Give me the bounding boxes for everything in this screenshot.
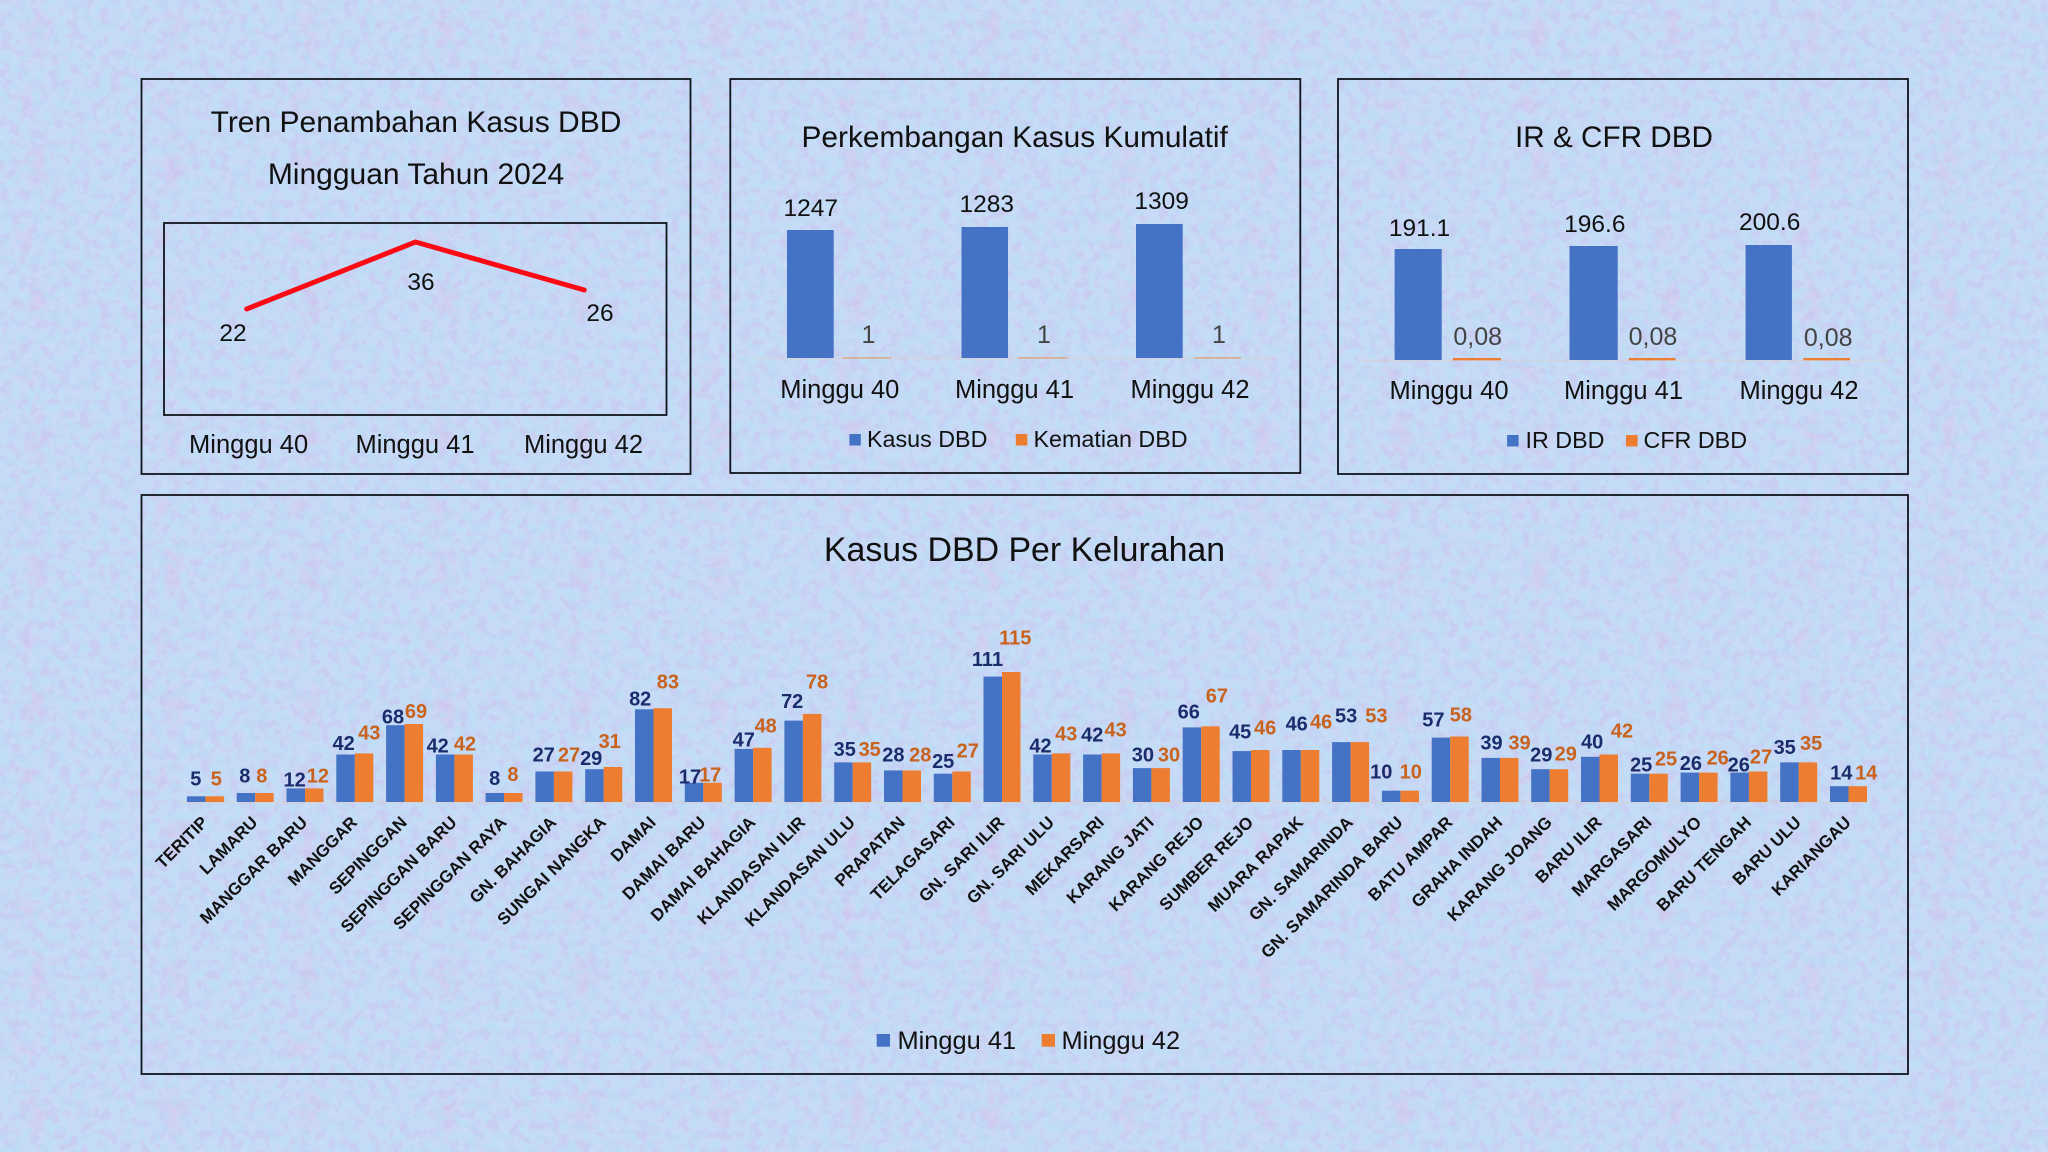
KLANDASAN ULU: 35 bbox=[859, 739, 881, 761]
KARANG JATI: 30 bbox=[1132, 745, 1154, 767]
SEPINGGAN: 69 bbox=[405, 701, 427, 723]
GN. SAMARINDA BARU bbox=[1257, 762, 1422, 962]
bar chart: IR and CFR: 0,08 bbox=[1629, 323, 1677, 351]
SEPINGGAN bbox=[325, 701, 427, 898]
GN. BAHAGIA: GN. BAHAGIA bbox=[466, 813, 560, 907]
DAMAI BARU: 17 bbox=[699, 765, 721, 787]
GRAHA INDAH bbox=[1408, 732, 1531, 911]
KARIANGAU: 14 bbox=[1855, 762, 1878, 784]
KLANDASAN ILIR: 78 bbox=[806, 671, 828, 693]
SEPINGGAN RAYA bbox=[390, 764, 523, 934]
MUARA RAPAK: 46 bbox=[1286, 714, 1308, 736]
SUNGAI NANGKA: SUNGAI NANGKA bbox=[494, 813, 610, 929]
title: weekly trend bbox=[211, 106, 621, 191]
bar chart: cumulative cases: 1 bbox=[1212, 321, 1226, 349]
GN. BAHAGIA bbox=[466, 745, 580, 907]
bar chart: IR and CFR: 191.1 bbox=[1389, 215, 1450, 242]
bar chart: IR and CFR: Minggu 40 bbox=[1389, 377, 1509, 405]
MEKARSARI: 42 bbox=[1081, 725, 1103, 747]
MUARA RAPAK: 46 bbox=[1310, 712, 1332, 734]
legend: IR and CFR bbox=[1507, 427, 1747, 453]
MANGGAR: 43 bbox=[358, 722, 380, 744]
DAMAI: 83 bbox=[657, 672, 679, 694]
GN. SAMARINDA BARU: 10 bbox=[1400, 762, 1422, 784]
TERITIP: TERITIP bbox=[152, 813, 212, 872]
bar chart: cumulative cases: 1247 bbox=[783, 195, 838, 222]
BARU ULU: BARU ULU bbox=[1729, 813, 1805, 889]
KARANG JOANG: 29 bbox=[1555, 744, 1577, 766]
KLANDASAN ILIR bbox=[694, 671, 828, 928]
KARIANGAU: KARIANGAU bbox=[1768, 813, 1855, 900]
GRAHA INDAH: 39 bbox=[1480, 732, 1503, 754]
GN. BAHAGIA: 27 bbox=[533, 745, 555, 767]
SEPINGGAN BARU: SEPINGGAN BARU bbox=[337, 813, 461, 936]
DAMAI BARU bbox=[619, 765, 722, 904]
SEPINGGAN RAYA: SEPINGGAN RAYA bbox=[390, 813, 510, 934]
line chart axis labels: Minggu 40 bbox=[189, 431, 308, 459]
KARIANGAU: 14 bbox=[1830, 762, 1853, 784]
KLANDASAN ULU: 35 bbox=[834, 739, 856, 761]
line chart axis labels bbox=[189, 431, 643, 459]
GN. SARI ULU: GN. SARI ULU bbox=[963, 813, 1058, 908]
LAMARU: LAMARU bbox=[196, 813, 261, 878]
TERITIP: 5 bbox=[211, 769, 222, 791]
legend: week 41 and 42 bbox=[877, 1027, 1180, 1055]
SUNGAI NANGKA: 31 bbox=[599, 731, 621, 753]
SEPINGGAN BARU: 42 bbox=[454, 734, 476, 756]
MARGASARI: 25 bbox=[1655, 749, 1677, 771]
SEPINGGAN RAYA: 8 bbox=[507, 764, 518, 786]
MARGOMULYO: MARGOMULYO bbox=[1604, 813, 1705, 915]
panel: cumulative cases bbox=[730, 79, 1300, 473]
line chart axis labels: Minggu 41 bbox=[355, 431, 475, 459]
MANGGAR bbox=[284, 722, 380, 890]
BARU ILIR bbox=[1532, 720, 1633, 887]
legend: week 41 and 42: Minggu 41 bbox=[898, 1027, 1016, 1055]
DAMAI BARU: 17 bbox=[679, 766, 701, 788]
LAMARU bbox=[196, 765, 274, 878]
KARIANGAU bbox=[1768, 762, 1878, 900]
GN. SAMARINDA: GN. SAMARINDA bbox=[1245, 813, 1357, 924]
KARANG JATI: 30 bbox=[1158, 745, 1180, 767]
SEPINGGAN BARU: 42 bbox=[427, 736, 449, 758]
KLANDASAN ILIR: KLANDASAN ILIR bbox=[694, 813, 809, 928]
DAMAI: 82 bbox=[629, 689, 651, 711]
LAMARU: 8 bbox=[256, 765, 267, 787]
MANGGAR: 42 bbox=[332, 733, 355, 755]
BARU ILIR: 40 bbox=[1581, 732, 1603, 754]
title: weekly trend: Mingguan Tahun 2024 bbox=[268, 158, 564, 191]
GN. SARI ILIR: 111 bbox=[972, 649, 1003, 671]
title: IR and CFR: IR & CFR DBD bbox=[1515, 121, 1713, 154]
SEPINGGAN: 68 bbox=[382, 706, 404, 728]
panel: weekly trend line chart bbox=[142, 79, 690, 474]
TERITIP: 5 bbox=[190, 769, 201, 791]
title: cases per kelurahan: Kasus DBD Per Kelurahan bbox=[824, 531, 1225, 569]
MANGGAR BARU bbox=[196, 766, 329, 928]
bar chart: cumulative cases: 1309 bbox=[1134, 188, 1189, 215]
bar chart: IR and CFR bbox=[1362, 209, 1886, 405]
TELAGASARI bbox=[867, 740, 979, 904]
BATU AMPAR: 58 bbox=[1450, 705, 1472, 727]
MUARA RAPAK: MUARA RAPAK bbox=[1204, 812, 1308, 916]
LAMARU: 8 bbox=[239, 765, 250, 787]
bar chart: cases per kelurahan bbox=[152, 627, 1878, 962]
MARGASARI: MARGASARI bbox=[1568, 813, 1656, 900]
GN. BAHAGIA: 27 bbox=[558, 745, 580, 767]
bar chart: cumulative cases: Minggu 41 bbox=[955, 376, 1074, 404]
SEPINGGAN RAYA: 8 bbox=[489, 768, 500, 790]
PRAPATAN: PRAPATAN bbox=[831, 813, 909, 890]
KLANDASAN ULU bbox=[741, 739, 881, 930]
BARU TENGAH: 27 bbox=[1750, 746, 1772, 768]
legend: week 41 and 42: Minggu 42 bbox=[1062, 1027, 1180, 1055]
DAMAI BARU: DAMAI BARU bbox=[619, 813, 710, 904]
legend: cumulative cases: Kematian DBD bbox=[1034, 426, 1188, 452]
GN. SARI ILIR: GN. SARI ILIR bbox=[915, 813, 1008, 906]
BARU TENGAH bbox=[1653, 746, 1772, 915]
SUMBER REJO bbox=[1156, 717, 1276, 914]
GRAHA INDAH: GRAHA INDAH bbox=[1408, 813, 1506, 911]
PRAPATAN: 28 bbox=[909, 745, 931, 767]
legend: IR and CFR: IR DBD bbox=[1526, 427, 1604, 453]
bar chart: cumulative cases: Minggu 40 bbox=[780, 376, 899, 404]
GN. SARI ULU: 42 bbox=[1029, 736, 1052, 758]
MANGGAR BARU: 12 bbox=[283, 770, 306, 792]
MEKARSARI: MEKARSARI bbox=[1022, 813, 1108, 899]
BARU TENGAH: BARU TENGAH bbox=[1653, 813, 1755, 915]
bar chart: IR and CFR: 0,08 bbox=[1453, 323, 1502, 351]
DAMAI BAHAGIA bbox=[647, 716, 777, 925]
BARU ULU: 35 bbox=[1774, 737, 1796, 759]
line chart plot area: 36 bbox=[407, 269, 435, 296]
KLANDASAN ULU: KLANDASAN ULU bbox=[741, 813, 859, 930]
legend: cumulative cases bbox=[849, 426, 1188, 452]
KARANG REJO: 67 bbox=[1206, 686, 1228, 708]
KARANG JATI bbox=[1063, 745, 1180, 907]
DAMAI: DAMAI bbox=[607, 813, 660, 866]
BATU AMPAR: BATU AMPAR bbox=[1364, 813, 1456, 905]
bar chart: cumulative cases bbox=[754, 188, 1275, 404]
KLANDASAN ILIR: 72 bbox=[781, 691, 803, 713]
title: weekly trend: Tren Penambahan Kasus DBD bbox=[211, 106, 621, 139]
legend: IR and CFR: CFR DBD bbox=[1644, 427, 1747, 453]
title: cumulative cases: Perkembangan Kasus Kumulatif bbox=[802, 121, 1229, 154]
BARU ULU bbox=[1729, 733, 1822, 889]
KARANG REJO: KARANG REJO bbox=[1105, 813, 1207, 915]
KARANG JATI: KARANG JATI bbox=[1063, 813, 1158, 907]
SUMBER REJO: SUMBER REJO bbox=[1156, 813, 1257, 914]
bar chart: IR and CFR: Minggu 42 bbox=[1739, 377, 1859, 405]
KARANG JOANG: KARANG JOANG bbox=[1444, 813, 1556, 925]
bar chart: cumulative cases: Minggu 42 bbox=[1130, 376, 1250, 404]
BARU TENGAH: 26 bbox=[1728, 754, 1750, 776]
GN. SARI ILIR bbox=[915, 627, 1031, 906]
DAMAI bbox=[607, 672, 679, 866]
SEPINGGAN BARU bbox=[337, 734, 476, 936]
GN. SAMARINDA BARU: GN. SAMARINDA BARU bbox=[1257, 813, 1407, 962]
MEKARSARI: 43 bbox=[1104, 720, 1127, 742]
SUNGAI NANGKA: 29 bbox=[580, 748, 602, 770]
bar chart: cumulative cases: 1 bbox=[862, 321, 875, 349]
KARANG REJO: 66 bbox=[1178, 701, 1200, 723]
GN. SAMARINDA: 53 bbox=[1335, 706, 1357, 728]
GN. SAMARINDA BARU: 10 bbox=[1370, 762, 1392, 784]
SEPINGGAN: SEPINGGAN bbox=[325, 813, 411, 898]
panel: IR and CFR bbox=[1338, 79, 1908, 474]
MANGGAR BARU: MANGGAR BARU bbox=[196, 813, 311, 928]
line chart axis labels: Minggu 42 bbox=[524, 431, 643, 459]
TERITIP bbox=[152, 769, 224, 872]
BARU ULU: 35 bbox=[1800, 733, 1822, 755]
line chart plot area bbox=[164, 223, 666, 415]
legend: cumulative cases: Kasus DBD bbox=[867, 426, 987, 452]
GN. SARI ULU: 43 bbox=[1055, 723, 1077, 745]
GN. SAMARINDA: 53 bbox=[1365, 706, 1388, 728]
BARU ILIR: 42 bbox=[1611, 720, 1633, 742]
bar chart: IR and CFR: 0,08 bbox=[1804, 324, 1853, 352]
KARANG JOANG: 29 bbox=[1530, 745, 1552, 767]
MARGASARI: 25 bbox=[1630, 755, 1652, 777]
GN. SAMARINDA bbox=[1245, 706, 1388, 924]
bar chart: cumulative cases: 1283 bbox=[959, 191, 1014, 218]
TELAGASARI: TELAGASARI bbox=[867, 813, 959, 904]
panel: cases per kelurahan bbox=[142, 495, 1908, 1074]
KARANG JOANG bbox=[1444, 744, 1577, 925]
SUMBER REJO: 46 bbox=[1254, 717, 1276, 739]
BATU AMPAR bbox=[1364, 705, 1472, 905]
MANGGAR BARU: 12 bbox=[307, 766, 329, 788]
BATU AMPAR: 57 bbox=[1422, 710, 1445, 732]
bar chart: cumulative cases: 1 bbox=[1037, 321, 1051, 349]
PRAPATAN bbox=[831, 745, 931, 890]
TELAGASARI: 25 bbox=[932, 751, 954, 773]
KARANG REJO bbox=[1105, 686, 1228, 915]
MARGASARI bbox=[1568, 749, 1677, 900]
SUMBER REJO: 45 bbox=[1229, 721, 1251, 743]
MANGGAR: MANGGAR bbox=[284, 813, 361, 890]
line chart plot area: 22 bbox=[219, 320, 247, 347]
BARU ILIR: BARU ILIR bbox=[1532, 813, 1606, 887]
DAMAI BAHAGIA: DAMAI BAHAGIA bbox=[647, 813, 759, 925]
MARGOMULYO bbox=[1604, 748, 1729, 915]
MARGOMULYO: 26 bbox=[1707, 748, 1729, 770]
bar chart: IR and CFR: 200.6 bbox=[1739, 209, 1800, 236]
line chart plot area: 26 bbox=[586, 300, 614, 327]
DAMAI BAHAGIA: 48 bbox=[755, 716, 777, 738]
DAMAI BAHAGIA: 47 bbox=[733, 730, 755, 752]
TELAGASARI: 27 bbox=[957, 740, 979, 762]
GRAHA INDAH: 39 bbox=[1508, 732, 1531, 754]
MUARA RAPAK bbox=[1204, 712, 1332, 916]
SUNGAI NANGKA bbox=[494, 731, 622, 929]
bar chart: IR and CFR: 196.6 bbox=[1564, 211, 1625, 238]
PRAPATAN: 28 bbox=[882, 745, 905, 767]
MARGOMULYO: 26 bbox=[1680, 753, 1702, 775]
MEKARSARI bbox=[1022, 720, 1127, 899]
bar chart: IR and CFR: Minggu 41 bbox=[1564, 377, 1683, 405]
GN. SARI ULU bbox=[963, 723, 1077, 908]
GN. SARI ILIR: 115 bbox=[999, 627, 1031, 649]
